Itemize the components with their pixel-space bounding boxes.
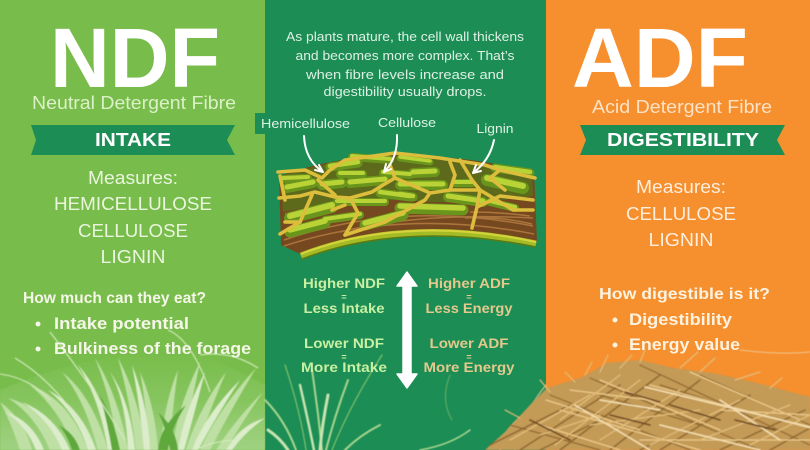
arrow: cellulose pointer <box>384 135 397 172</box>
text block: NDF relationships: = <box>341 292 347 302</box>
text block: NDF question and bullets: Bulkiness of the forage <box>54 339 251 358</box>
text block: ADF question and bullets: Energy value <box>629 335 740 354</box>
text block: ADF question and bullets: How digestible is it? <box>599 286 770 303</box>
text block: ADF relationships: = <box>466 352 472 362</box>
text block: ADF relationships: Higher ADF <box>428 275 510 291</box>
text block: ADF relationships: Lower ADF <box>430 335 509 351</box>
hemicellulose and lignin network <box>278 153 535 235</box>
text block: NDF relationships: Higher NDF <box>303 275 385 291</box>
label: Hemicellulose: Hemicellulose <box>261 116 350 131</box>
text block: ADF question and bullets <box>599 286 770 354</box>
text block: NDF relationships: More Intake <box>301 359 387 375</box>
banner: INTAKE <box>31 125 235 155</box>
subheading: Neutral Detergent Fibre: Neutral Detergent Fibre <box>32 93 236 113</box>
text block: ADF relationships: Less Energy <box>426 300 513 316</box>
text block: NDF question and bullets: How much can they eat? <box>23 290 206 307</box>
text block: ADF measures: CELLULOSE <box>626 204 736 224</box>
panel: explanation background <box>265 0 546 450</box>
text block: NDF relationships: = <box>341 352 347 362</box>
illustration: plant cell wall <box>278 153 537 259</box>
text block: NDF question and bullets: Intake potential <box>54 314 189 333</box>
illustration: hay pile <box>485 350 810 450</box>
banner: DIGESTIBILITY <box>580 125 785 155</box>
panel: ADF background <box>546 0 810 450</box>
banner: DIGESTIBILITY: DIGESTIBILITY <box>607 130 759 150</box>
label: Hemicellulose <box>255 113 350 134</box>
illustration: grass on left panel <box>0 330 265 450</box>
text block: NDF relationships: Lower NDF <box>304 335 384 351</box>
arrow: lignin pointer <box>473 140 494 173</box>
text block: ADF question and bullets: Digestibility <box>629 310 733 329</box>
text block: NDF measures <box>54 168 212 267</box>
cell wall outer layer <box>301 230 536 259</box>
text block: ADF relationships: More Energy <box>424 359 515 375</box>
banner: INTAKE: INTAKE <box>95 130 171 150</box>
text block: NDF question and bullets <box>23 290 251 358</box>
arrow: double-headed vertical <box>397 272 417 388</box>
arrow: hemicellulose pointer <box>304 136 323 172</box>
text block: ADF relationships <box>424 275 515 375</box>
label: Cellulose: Cellulose <box>378 115 436 130</box>
text block: NDF relationships: Less Intake <box>304 300 385 316</box>
text block: ADF measures: LIGNIN <box>648 230 714 250</box>
text block: NDF measures: CELLULOSE <box>78 221 188 241</box>
label: Lignin: Lignin <box>476 121 514 136</box>
illustration: grass on center panel <box>265 355 546 450</box>
cellulose fibres <box>283 156 530 232</box>
text block: ADF measures: Measures: <box>636 177 726 197</box>
text block: cell wall explanation: when fibre levels increase and <box>305 68 504 82</box>
heading: NDF: NDF <box>50 11 220 105</box>
text block: cell wall explanation <box>286 30 524 99</box>
text block: cell wall explanation: As plants mature, the cell wall thickens <box>286 30 524 44</box>
text block: ADF relationships: = <box>466 292 472 302</box>
text block: NDF measures: HEMICELLULOSE <box>54 194 212 214</box>
text block: cell wall explanation: digestibility usually drops. <box>324 85 486 99</box>
heading: ADF: ADF <box>572 11 748 105</box>
cell wall brown layers <box>279 155 537 254</box>
upper olive shading <box>281 157 533 212</box>
text block: ADF measures <box>626 177 736 250</box>
text block: NDF measures: LIGNIN <box>100 247 166 267</box>
text block: NDF measures: Measures: <box>88 168 178 188</box>
text block: NDF relationships <box>301 275 387 375</box>
panel: NDF background <box>0 0 265 450</box>
text block: cell wall explanation: and becomes more complex. That’s <box>296 49 514 63</box>
subheading: Acid Detergent Fibre: Acid Detergent Fibre <box>592 97 772 117</box>
